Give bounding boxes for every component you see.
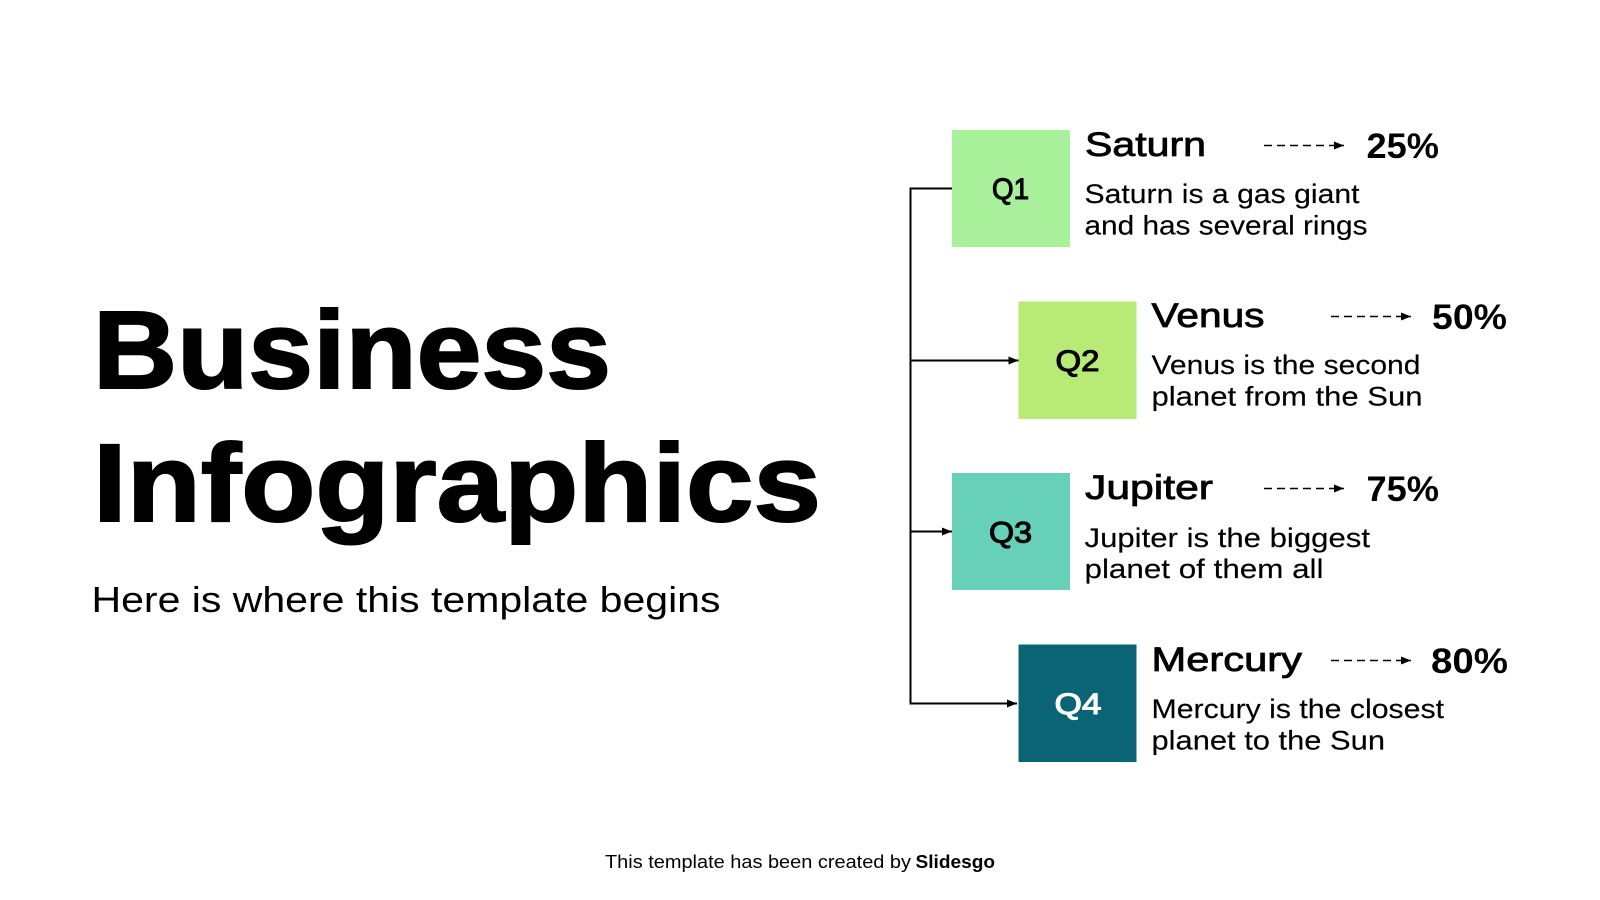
square: Q4: Q4 xyxy=(1054,688,1102,721)
title: Infographics xyxy=(93,422,821,545)
description: Saturn: and has several rings xyxy=(1084,210,1368,240)
description: Venus xyxy=(1152,350,1422,412)
connector lines xyxy=(910,188,1018,704)
title xyxy=(93,289,821,545)
item: Q1 Saturn xyxy=(952,126,1439,247)
arrow: Venus xyxy=(1331,316,1411,318)
square: Q4 xyxy=(1018,644,1136,762)
heading: Venus: Venus xyxy=(1152,297,1264,335)
description: Jupiter: planet of them all xyxy=(1084,554,1324,584)
square: Q3: Q3 xyxy=(989,516,1032,550)
value: 25%: 25% xyxy=(1366,127,1439,166)
arrow: Mercury xyxy=(1331,660,1411,662)
heading: Saturn: Saturn xyxy=(1085,126,1206,164)
square: Q1 xyxy=(952,130,1070,247)
square: Q2 xyxy=(1018,302,1136,419)
description: Mercury: planet to the Sun xyxy=(1152,726,1385,756)
item: Q3 Jupiter xyxy=(952,469,1439,590)
value: 50%: 50% xyxy=(1432,298,1507,337)
value: 80%: 80% xyxy=(1431,642,1508,681)
description: Venus: planet from the Sun xyxy=(1152,382,1422,412)
arrow: Jupiter xyxy=(1264,488,1344,490)
heading: Mercury: Mercury xyxy=(1152,641,1302,679)
description: Saturn: Saturn is a gas giant xyxy=(1084,179,1360,209)
subtitle: Here is where this template begins xyxy=(92,579,720,620)
description: Jupiter: Jupiter is the biggest xyxy=(1084,523,1371,553)
title: Business xyxy=(93,289,611,412)
description: Venus: Venus is the second xyxy=(1152,350,1420,380)
description: Saturn xyxy=(1084,179,1368,240)
heading: Jupiter: Jupiter xyxy=(1085,469,1213,507)
description: Jupiter xyxy=(1084,523,1371,584)
square: Q1: Q1 xyxy=(992,173,1029,206)
footer credit: Slidesgo xyxy=(916,852,995,872)
description: Mercury: Mercury is the closest xyxy=(1152,694,1445,724)
footer credit: This template has been created by xyxy=(605,852,911,872)
description: Mercury xyxy=(1152,694,1445,756)
item: Q4 Mercury xyxy=(1018,641,1508,762)
square: Q3 xyxy=(952,473,1070,590)
square: Q2: Q2 xyxy=(1056,345,1100,378)
item: Q2 Venus xyxy=(1018,297,1507,419)
arrow: Saturn xyxy=(1264,144,1344,146)
value: 75%: 75% xyxy=(1366,470,1439,509)
